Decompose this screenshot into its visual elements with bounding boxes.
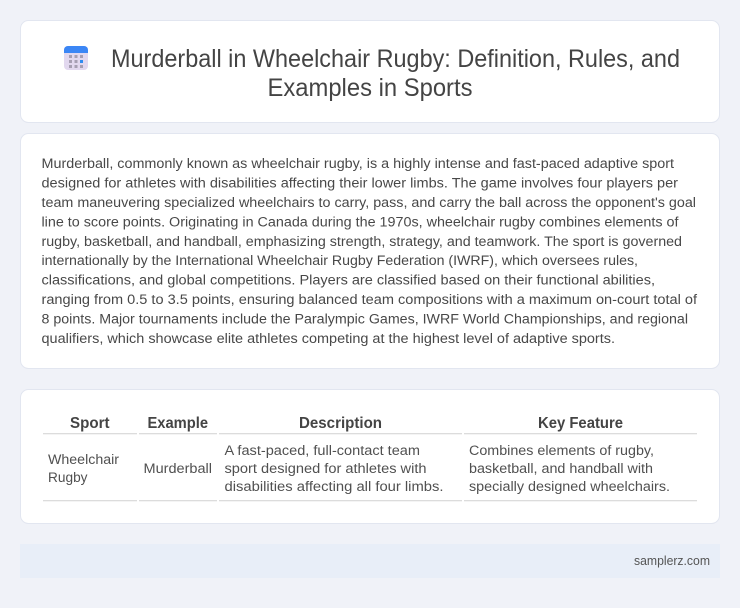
panel: title card (20, 20, 720, 122)
text block: paragraph: team maneuvering specialized wheelchairs to carry, pass, and carry the ball across the opponent's goal (42, 195, 696, 211)
table cell: key feature (469, 443, 670, 495)
table header (70, 415, 623, 432)
table cell: key feature: basketball, and handball with (469, 461, 653, 477)
text block: paragraph: rugby, basketball, and handball, emphasizing strength, strategy, and teamwork. The sport is governed (42, 234, 682, 250)
table cell: sport (48, 452, 119, 486)
table cell: description: sport designed for athletes with (224, 461, 426, 477)
table cell: sport: Wheelchair (48, 452, 119, 468)
table cell: key feature: Combines elements of rugby, (469, 443, 654, 459)
title: Examples in Sports (268, 74, 472, 102)
table cell: example: Murderball (144, 461, 212, 477)
table header: Key Feature (538, 415, 623, 432)
text block: paragraph: designed for athletes with disabilities affecting their lower limbs. The game involves four players per (42, 175, 678, 191)
footer (20, 544, 720, 578)
text block: paragraph (42, 156, 697, 347)
table header: Sport (70, 415, 110, 432)
title: Murderball in Wheelchair Rugby: Definition, Rules, and (111, 45, 680, 73)
text block: paragraph: ranging from 0.5 to 3.5 points, ensuring balanced team compositions with a maximum on-court total of (42, 292, 697, 308)
table cell: sport: Rugby (48, 470, 88, 486)
table header: Description (299, 415, 382, 432)
text block: paragraph: internationally by the International Wheelchair Rugby Federation (IWRF), which oversees rules, (42, 253, 638, 269)
text block: paragraph: qualifiers, which showcase elite athletes competing at the highest level of adaptive sports. (42, 331, 615, 347)
table cell: description (224, 443, 444, 495)
text block: paragraph: line to score points. Originating in Canada during the 1970s, wheelchair rugby combines elements of (42, 214, 679, 230)
icon: calendar (64, 46, 88, 70)
text block: paragraph: classifications, and global competitions. Players are classified based on their functional abilities, (42, 273, 655, 289)
table header: Example (148, 415, 208, 432)
table cell: key feature: specially designed wheelchairs. (469, 479, 670, 495)
title (111, 45, 680, 102)
text block: paragraph: 8 points. Major tournaments include the Paralympic Games, IWRF World Championships, and regional (42, 312, 688, 328)
table cell: description: disabilities affecting all four limbs. (224, 479, 444, 495)
footer text: samplerz.com (634, 554, 710, 568)
table cell: description: A fast-paced, full-contact team (224, 443, 420, 459)
panel: description paragraph (20, 134, 720, 368)
panel: table (20, 390, 720, 524)
text block: paragraph: Murderball, commonly known as wheelchair rugby, is a highly intense and fast-paced adaptive sport (42, 156, 674, 172)
